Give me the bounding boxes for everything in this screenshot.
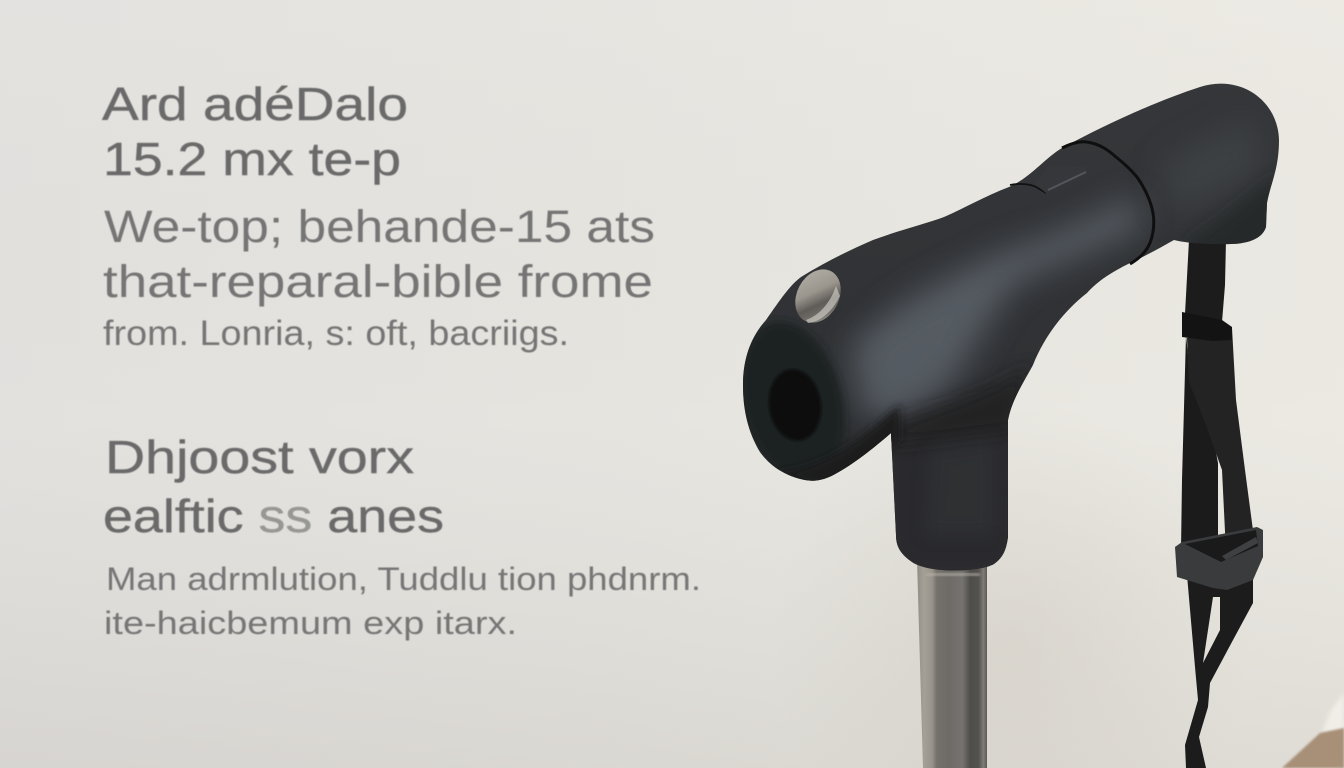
text block: top description: We-top; behande-15 ats (104, 201, 655, 252)
cane handle (724, 70, 1290, 580)
strap left band (1181, 335, 1218, 550)
silver rivet (786, 261, 850, 331)
strap slider (1175, 527, 1263, 590)
heading: lower block: ealftic ss anes (103, 490, 444, 542)
handle lower shadow (780, 404, 904, 481)
text block: top description: from. Lonria, s: oft, bacriigs. (103, 314, 569, 353)
heading: lower block: Dhjoost vorx (105, 431, 414, 483)
handle stem (880, 395, 1022, 580)
tip hole (764, 366, 826, 444)
heading: top block: 15.2 mx te-p (103, 133, 401, 185)
wrist strap (1175, 240, 1263, 768)
strap lower strips (1185, 570, 1253, 768)
text block: lower description: ite-haicbemum exp itarx. (104, 605, 517, 641)
metal pole (917, 560, 987, 768)
handle highlight (850, 195, 1145, 419)
handle body (724, 70, 1290, 580)
floor corner (1282, 692, 1344, 768)
strap right band (1187, 328, 1254, 552)
seam ring (1062, 142, 1154, 264)
heading: lower block (103, 431, 444, 542)
strap loop fold (1182, 312, 1232, 341)
text block: lower description: Man adrmlution, Tuddlu tion phdnrm. (106, 561, 701, 597)
strap upper band (1185, 240, 1226, 322)
heading: top block (102, 78, 408, 185)
heading: top block: Ard adéDalo (102, 78, 408, 130)
text block: lower description (104, 561, 701, 641)
handle tip shade (743, 320, 846, 481)
seam tab (1010, 165, 1087, 193)
text block: top description: that-reparal-bible frome (103, 256, 653, 307)
text block: top description (103, 201, 655, 353)
